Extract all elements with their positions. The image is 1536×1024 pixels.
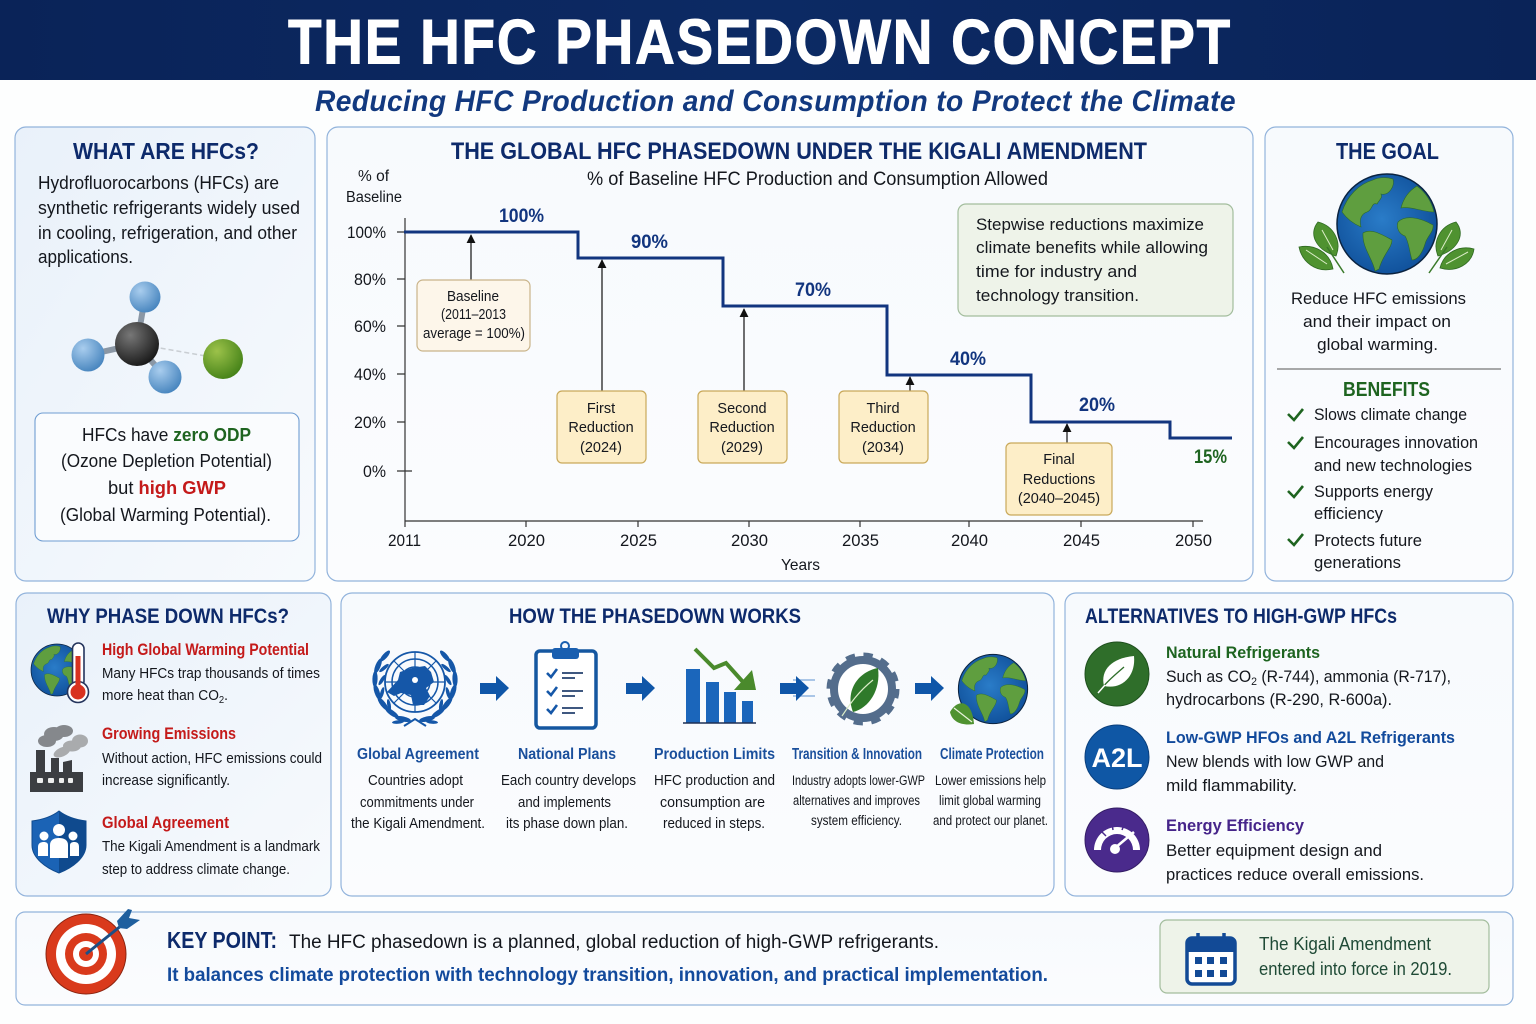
callout: Kigali entry into force: The Kigali Amendment bbox=[1259, 934, 1431, 954]
panel: how the phasedown works bbox=[341, 593, 1054, 896]
header banner bbox=[0, 0, 1536, 80]
callout: zero ODP high GWP: HFCs have zero ODP bbox=[82, 425, 251, 445]
step: national plans: Each country develops bbox=[501, 773, 636, 789]
check icons bbox=[1288, 409, 1303, 545]
chart heading: THE GLOBAL HFC PHASEDOWN UNDER THE KIGALI AMENDMENT bbox=[451, 138, 1147, 165]
item: high GWP: High Global Warming Potential bbox=[102, 641, 309, 659]
title: THE HFC PHASEDOWN CONCEPT bbox=[288, 8, 1232, 78]
goal text bbox=[1291, 289, 1466, 354]
annotation: first reduction bbox=[557, 260, 646, 463]
x axis labels: 2011 bbox=[388, 532, 421, 550]
step value labels: 100% bbox=[499, 206, 544, 227]
x axis labels: 2025 bbox=[620, 532, 657, 550]
step: national plans: National Plans bbox=[518, 746, 616, 763]
step: production limits: reduced in steps. bbox=[663, 816, 765, 832]
description: Hydrofluorocarbons (HFCs) are bbox=[38, 173, 279, 193]
alternative: low GWP HFOs: Low-GWP HFOs and A2L Refrigerants bbox=[1166, 728, 1455, 747]
annotation: first reduction: Reduction bbox=[568, 420, 634, 436]
item: high GWP: Many HFCs trap thousands of times bbox=[102, 666, 320, 682]
alternative: natural refrigerants: Such as CO bbox=[1166, 668, 1255, 686]
description bbox=[38, 173, 300, 267]
alternative: natural refrigerants: hydrocarbons (R-290, R-600a). bbox=[1166, 691, 1392, 709]
key point line 1: The HFC phasedown is a planned, global reduction of high-GWP refrigerants. bbox=[289, 932, 939, 953]
callout: stepwise reductions: climate benefits while allowing bbox=[976, 238, 1208, 257]
icon: globe with leaf bbox=[950, 654, 1028, 724]
step value labels: 90% bbox=[631, 232, 668, 253]
benefits list: Protects future bbox=[1314, 532, 1422, 550]
goal text: and their impact on bbox=[1303, 312, 1451, 331]
icon: A2L badge bbox=[1085, 725, 1149, 789]
item: growing emissions bbox=[102, 725, 322, 789]
heading: HOW THE PHASEDOWN WORKS bbox=[509, 605, 801, 628]
alternative: natural refrigerants bbox=[1166, 643, 1451, 709]
heading: WHY PHASE DOWN HFCs? bbox=[47, 605, 289, 628]
icon: calendar bbox=[1187, 933, 1235, 984]
y axis title: % of bbox=[358, 168, 390, 185]
icon: molecule bbox=[72, 282, 243, 394]
step: climate protection: Climate Protection bbox=[940, 746, 1044, 763]
heading: WHAT ARE HFCs? bbox=[73, 138, 259, 164]
alternative: energy efficiency: practices reduce overall emissions. bbox=[1166, 866, 1424, 884]
icon: shield with people bbox=[32, 811, 86, 873]
step: climate protection: Lower emissions help bbox=[935, 773, 1046, 788]
annotation: first reduction: (2024) bbox=[580, 440, 622, 456]
callout: stepwise reductions: time for industry and bbox=[976, 262, 1137, 281]
panel: what are HFCs bbox=[15, 127, 315, 581]
step: transition and innovation: Transition & Innovation bbox=[792, 746, 922, 763]
item: global agreement bbox=[102, 814, 321, 878]
item: global agreement: The Kigali Amendment is a landmark bbox=[102, 839, 321, 855]
y axis labels: 100% bbox=[347, 224, 386, 242]
step line bbox=[404, 232, 1232, 438]
item: high GWP: . bbox=[224, 688, 228, 704]
item: high GWP: more heat than CO bbox=[102, 688, 225, 704]
step value labels: 70% bbox=[795, 280, 831, 301]
step: transition and innovation: alternatives and improves bbox=[793, 793, 920, 808]
chart subheading: % of Baseline HFC Production and Consumption Allowed bbox=[587, 169, 1048, 190]
step: production limits: Production Limits bbox=[654, 746, 775, 763]
annotation: final reductions: Reductions bbox=[1023, 472, 1095, 488]
description: in cooling, refrigeration, and other bbox=[38, 223, 297, 243]
item: global agreement: step to address climate change. bbox=[102, 862, 290, 878]
annotation: second reduction: Reduction bbox=[709, 420, 775, 436]
y axis title: Baseline bbox=[346, 189, 402, 206]
heading: ALTERNATIVES TO HIGH-GWP HFCs bbox=[1085, 605, 1397, 628]
callout: zero ODP high GWP: (Global Warming Potential). bbox=[60, 505, 271, 525]
alternative: low GWP HFOs: mild flammability. bbox=[1166, 777, 1297, 795]
annotation: final reductions bbox=[1006, 424, 1112, 515]
alternative: energy efficiency bbox=[1166, 816, 1424, 884]
x axis labels: 2035 bbox=[842, 532, 879, 550]
step: global agreement bbox=[351, 746, 485, 832]
key point heading: KEY POINT: bbox=[167, 927, 277, 953]
x axis labels: 2040 bbox=[951, 532, 988, 550]
arrow bbox=[626, 676, 655, 701]
panel: key point bbox=[16, 909, 1513, 1005]
step value labels bbox=[499, 206, 1227, 468]
item: high GWP: 2 bbox=[219, 695, 225, 706]
step: production limits: consumption are bbox=[660, 795, 765, 811]
icon: declining bars bbox=[683, 649, 756, 723]
annotation: baseline bbox=[417, 235, 530, 351]
annotation: third reduction: Reduction bbox=[850, 420, 916, 436]
benefits list bbox=[1288, 406, 1478, 572]
step: global agreement: Global Agreement bbox=[357, 746, 479, 763]
panel: Kigali phasedown chart bbox=[327, 127, 1253, 581]
icon: gauge badge bbox=[1085, 808, 1149, 872]
step: production limits: HFC production and bbox=[654, 773, 775, 789]
icon: clipboard checklist bbox=[536, 642, 596, 728]
annotation: second reduction: Second bbox=[717, 401, 767, 417]
callout: zero ODP high GWP: (Ozone Depletion Potential) bbox=[61, 451, 272, 471]
alternative: energy efficiency: Energy Efficiency bbox=[1166, 816, 1305, 835]
step value labels: 20% bbox=[1079, 395, 1115, 416]
callout: stepwise reductions bbox=[958, 204, 1233, 316]
goal text: global warming. bbox=[1317, 335, 1438, 354]
benefits list: Supports energy bbox=[1314, 483, 1434, 501]
annotation: baseline: Baseline bbox=[447, 289, 499, 305]
benefits list: and new technologies bbox=[1314, 457, 1472, 475]
annotation: second reduction bbox=[698, 309, 787, 463]
annotation: final reductions: Final bbox=[1043, 452, 1075, 468]
callout: zero ODP high GWP bbox=[35, 413, 299, 541]
panel: why phase down bbox=[16, 593, 331, 896]
x axis labels: 2045 bbox=[1063, 532, 1100, 550]
callout: stepwise reductions: Stepwise reductions maximize bbox=[976, 215, 1204, 234]
step: climate protection bbox=[933, 746, 1048, 828]
step: transition and innovation: system efficiency. bbox=[811, 813, 902, 828]
benefits heading: BENEFITS bbox=[1343, 379, 1430, 401]
alternative: natural refrigerants: (R-744), ammonia (R-717), bbox=[1257, 668, 1451, 686]
description: synthetic refrigerants widely used bbox=[38, 198, 300, 218]
callout: zero ODP high GWP: but high GWP bbox=[108, 478, 226, 498]
icon: gear with leaf bbox=[830, 656, 896, 722]
alternative: low GWP HFOs: New blends with low GWP and bbox=[1166, 753, 1384, 771]
benefits list: Encourages innovation bbox=[1314, 434, 1478, 452]
alternative: natural refrigerants: Natural Refrigerants bbox=[1166, 643, 1320, 662]
step: national plans bbox=[501, 746, 636, 832]
callout: Kigali entry into force: entered into force in 2019. bbox=[1259, 959, 1452, 979]
benefits list: Slows climate change bbox=[1314, 406, 1467, 424]
description: applications. bbox=[38, 247, 133, 267]
item: growing emissions: Without action, HFC emissions could bbox=[102, 751, 322, 767]
step: global agreement: commitments under bbox=[360, 795, 474, 811]
icon: factory bbox=[30, 725, 88, 792]
key point line 2: It balances climate protection with technology transition, innovation, and practical implementation. bbox=[167, 964, 1048, 986]
annotation: third reduction bbox=[839, 377, 928, 463]
alternative: low GWP HFOs bbox=[1166, 728, 1455, 795]
step: production limits bbox=[654, 746, 775, 832]
annotation: final reductions: (2040–2045) bbox=[1018, 491, 1100, 507]
callout: Kigali entry into force bbox=[1160, 920, 1489, 993]
step value labels: 40% bbox=[950, 349, 986, 370]
alternative: natural refrigerants: 2 bbox=[1251, 676, 1257, 688]
x axis title: Years bbox=[781, 557, 820, 574]
x axis labels: 2030 bbox=[731, 532, 768, 550]
alternative: energy efficiency: Better equipment design and bbox=[1166, 842, 1382, 860]
step: national plans: and implements bbox=[518, 795, 611, 811]
y axis labels: 60% bbox=[354, 318, 386, 336]
y axis labels: 20% bbox=[354, 414, 386, 432]
icon: target with dart bbox=[46, 909, 140, 994]
panel: alternatives bbox=[1065, 593, 1513, 896]
icon: A2L badge: A2L bbox=[1091, 743, 1143, 773]
step: transition and innovation: Industry adopts lower-GWP bbox=[792, 773, 925, 788]
step: national plans: its phase down plan. bbox=[506, 816, 628, 832]
step: global agreement: Countries adopt bbox=[368, 773, 463, 789]
annotation: third reduction: (2034) bbox=[862, 440, 904, 456]
icon: globe with leaves bbox=[1299, 174, 1474, 274]
item: growing emissions: Growing Emissions bbox=[102, 725, 236, 743]
subtitle: Reducing HFC Production and Consumption to Protect the Climate bbox=[315, 85, 1236, 118]
panel: the goal bbox=[1265, 127, 1513, 581]
item: growing emissions: increase significantly. bbox=[102, 773, 230, 789]
step: climate protection: and protect our planet. bbox=[933, 813, 1048, 828]
y axis labels: 40% bbox=[354, 366, 386, 384]
x axis labels: 2050 bbox=[1175, 532, 1212, 550]
goal text: Reduce HFC emissions bbox=[1291, 289, 1466, 308]
annotation: third reduction: Third bbox=[866, 401, 900, 417]
benefits list: generations bbox=[1314, 554, 1401, 572]
annotation: baseline: average = 100%) bbox=[423, 326, 525, 342]
benefits list: efficiency bbox=[1314, 505, 1384, 523]
y axis labels: 80% bbox=[354, 271, 386, 289]
item: high GWP bbox=[102, 641, 320, 706]
step value labels: 15% bbox=[1194, 447, 1227, 468]
y axis labels: 0% bbox=[363, 463, 386, 481]
arrow bbox=[915, 676, 944, 701]
icon: UN emblem bbox=[372, 649, 458, 726]
icon: globe and thermometer bbox=[31, 643, 89, 702]
x axis labels bbox=[388, 532, 1212, 550]
arrow bbox=[480, 676, 509, 701]
step: global agreement: the Kigali Amendment. bbox=[351, 816, 485, 832]
y axis labels bbox=[347, 224, 386, 481]
arrow with speed lines bbox=[780, 676, 815, 701]
axes bbox=[397, 218, 1203, 527]
icon: leaf badge bbox=[1085, 642, 1149, 706]
heading: THE GOAL bbox=[1336, 138, 1439, 164]
annotation: first reduction: First bbox=[587, 401, 615, 417]
item: global agreement: Global Agreement bbox=[102, 814, 229, 832]
y axis title bbox=[346, 168, 402, 206]
step: climate protection: limit global warming bbox=[939, 793, 1041, 808]
callout: stepwise reductions: technology transition. bbox=[976, 286, 1139, 305]
step: transition and innovation bbox=[792, 746, 925, 828]
x axis labels: 2020 bbox=[508, 532, 545, 550]
annotation: baseline: (2011–2013 bbox=[441, 307, 506, 323]
annotation: second reduction: (2029) bbox=[721, 440, 763, 456]
